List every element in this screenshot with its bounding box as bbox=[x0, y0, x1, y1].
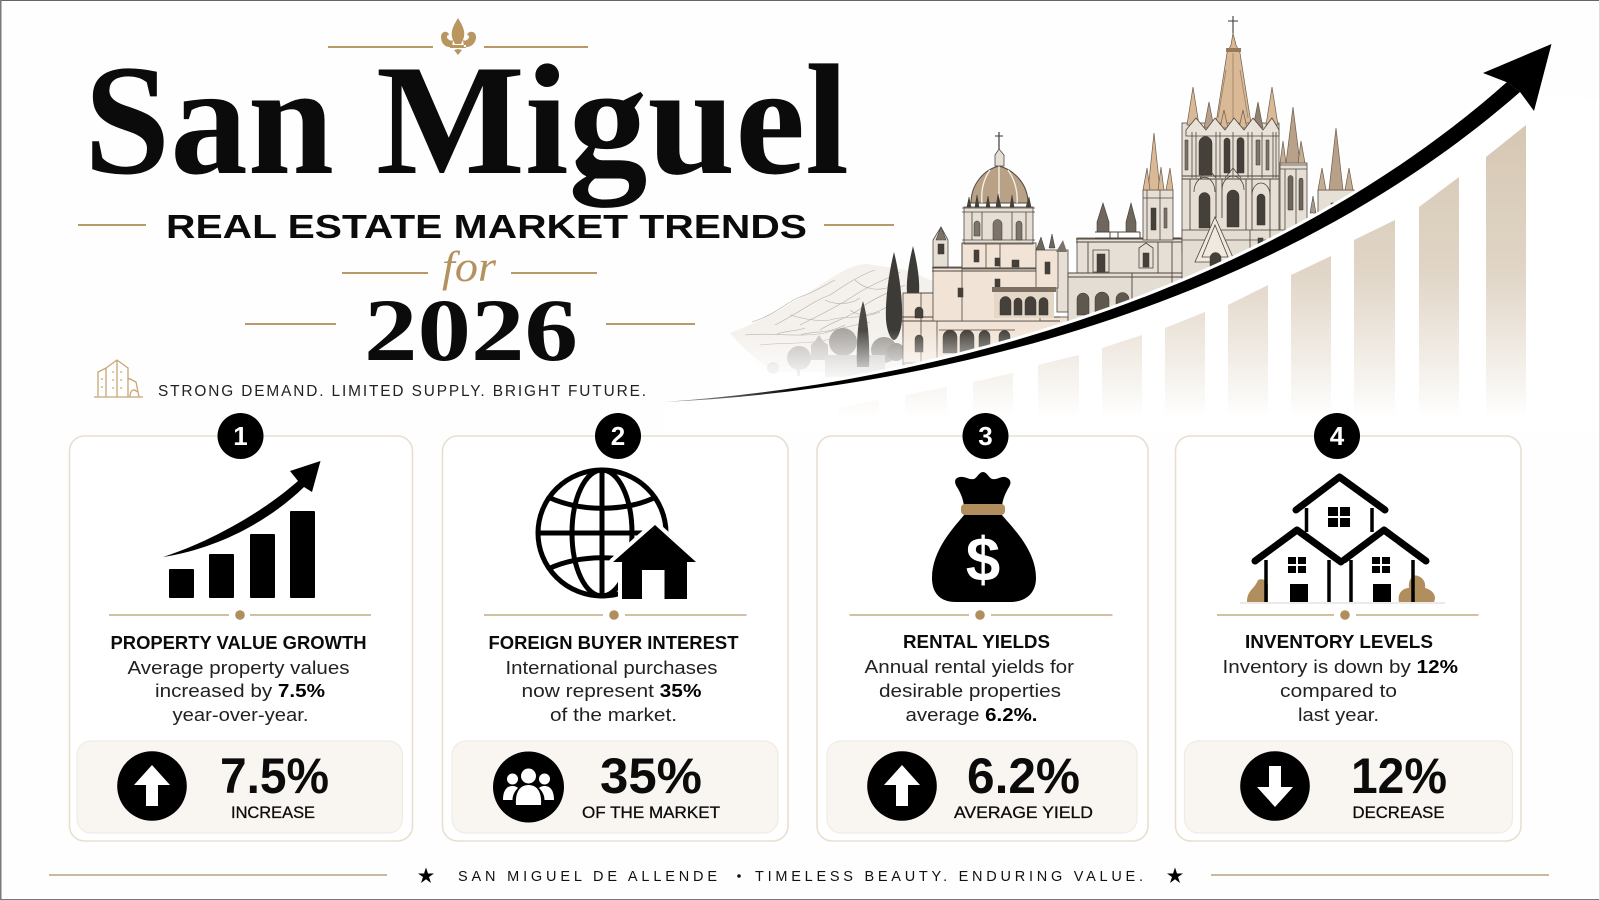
value: 35% bbox=[600, 748, 702, 804]
body text: increased by 7.5% bbox=[155, 681, 325, 701]
footer bbox=[49, 868, 1549, 885]
icon: money bag: $ bbox=[966, 526, 1000, 595]
illustration: San Miguel cathedral bbox=[720, 16, 1354, 390]
value: 12% bbox=[1351, 748, 1447, 804]
body text: year-over-year. bbox=[172, 705, 308, 725]
heading: PROPERTY VALUE GROWTH bbox=[110, 633, 366, 653]
panel: rental yields bbox=[817, 413, 1148, 841]
value: 6.2% bbox=[967, 748, 1080, 804]
footer: SAN MIGUEL DE ALLENDE bbox=[458, 869, 717, 885]
panel: foreign buyer interest bbox=[442, 413, 788, 841]
body text: average 6.2%. bbox=[906, 705, 1038, 725]
badge: 2: 2 bbox=[611, 421, 625, 451]
heading: FOREIGN BUYER INTEREST bbox=[488, 633, 738, 653]
divider bbox=[109, 610, 371, 620]
footer: TIMELESS BEAUTY. ENDURING VALUE. bbox=[755, 869, 1143, 885]
panel: inventory levels bbox=[1176, 413, 1521, 841]
stat panel bbox=[827, 741, 1137, 833]
badge: 4 bbox=[1314, 413, 1360, 459]
divider bbox=[484, 610, 746, 620]
panel: property value growth bbox=[70, 413, 412, 841]
icon: globe with house bbox=[538, 470, 700, 605]
body text: compared to bbox=[1280, 681, 1397, 701]
year 2026: 2026 bbox=[364, 282, 578, 380]
chart: background bars under arrow bbox=[663, 92, 1600, 430]
icon: up arrow bbox=[867, 751, 937, 821]
icon: up arrow bbox=[117, 751, 187, 821]
body text: Inventory is down by 12% bbox=[1222, 657, 1458, 677]
stat panel bbox=[1184, 741, 1512, 833]
badge: 2 bbox=[595, 413, 641, 459]
heading: INVENTORY LEVELS bbox=[1245, 632, 1433, 652]
body text: International purchases bbox=[506, 658, 718, 678]
divider bbox=[850, 610, 1112, 620]
badge: 3 bbox=[962, 413, 1008, 459]
left gothic tower bbox=[1143, 133, 1173, 240]
label: AVERAGE YIELD bbox=[954, 804, 1093, 822]
body text: now represent 35% bbox=[522, 681, 702, 701]
tagline: STRONG DEMAND. LIMITED SUPPLY. BRIGHT FUTURE. bbox=[158, 383, 646, 400]
badge: 3: 3 bbox=[978, 421, 993, 451]
badge: 1: 1 bbox=[233, 421, 248, 451]
stat panel bbox=[77, 741, 402, 833]
body text: last year. bbox=[1298, 705, 1379, 725]
title bbox=[84, 33, 849, 208]
trees bbox=[767, 246, 919, 377]
title: San bbox=[84, 33, 334, 208]
body text: desirable properties bbox=[879, 681, 1061, 701]
for: for bbox=[442, 244, 496, 291]
divider bbox=[1217, 610, 1478, 620]
heading: RENTAL YIELDS bbox=[903, 632, 1050, 652]
icon: rising bar chart bbox=[163, 461, 320, 598]
arrow: main growth curve bbox=[663, 44, 1552, 402]
body text: of the market. bbox=[550, 705, 677, 725]
value: 7.5% bbox=[220, 748, 329, 804]
title: Miguel bbox=[376, 33, 849, 208]
label: OF THE MARKET bbox=[582, 804, 720, 822]
body text: Average property values bbox=[128, 658, 350, 678]
body text bbox=[128, 658, 350, 725]
main cathedral tower and spire bbox=[1182, 16, 1292, 290]
right wing bbox=[1068, 203, 1186, 323]
icon: building bbox=[94, 360, 143, 397]
left wing bbox=[900, 268, 1068, 365]
icon: down arrow bbox=[1240, 751, 1310, 821]
label: INCREASE bbox=[231, 804, 315, 822]
icon: money bag bbox=[932, 472, 1036, 602]
ornament: fleur-de-lis with rules bbox=[328, 18, 588, 55]
body text bbox=[864, 657, 1074, 725]
body text bbox=[506, 658, 718, 725]
stat panel bbox=[452, 741, 778, 833]
badge: 1 bbox=[218, 413, 264, 459]
hill bbox=[730, 264, 935, 372]
body text: Annual rental yields for bbox=[864, 657, 1074, 677]
icon: people bbox=[493, 752, 564, 822]
subtitle with rules: REAL ESTATE MARKET TRENDS bbox=[166, 209, 807, 246]
badge: 4: 4 bbox=[1330, 421, 1345, 451]
dome body bbox=[932, 207, 1040, 321]
loggia and small tower bbox=[992, 234, 1068, 318]
far right towers bbox=[1280, 107, 1354, 233]
body text bbox=[1222, 657, 1458, 725]
icon: houses bbox=[1240, 477, 1445, 603]
label: DECREASE bbox=[1352, 804, 1444, 822]
dome bbox=[967, 132, 1031, 207]
